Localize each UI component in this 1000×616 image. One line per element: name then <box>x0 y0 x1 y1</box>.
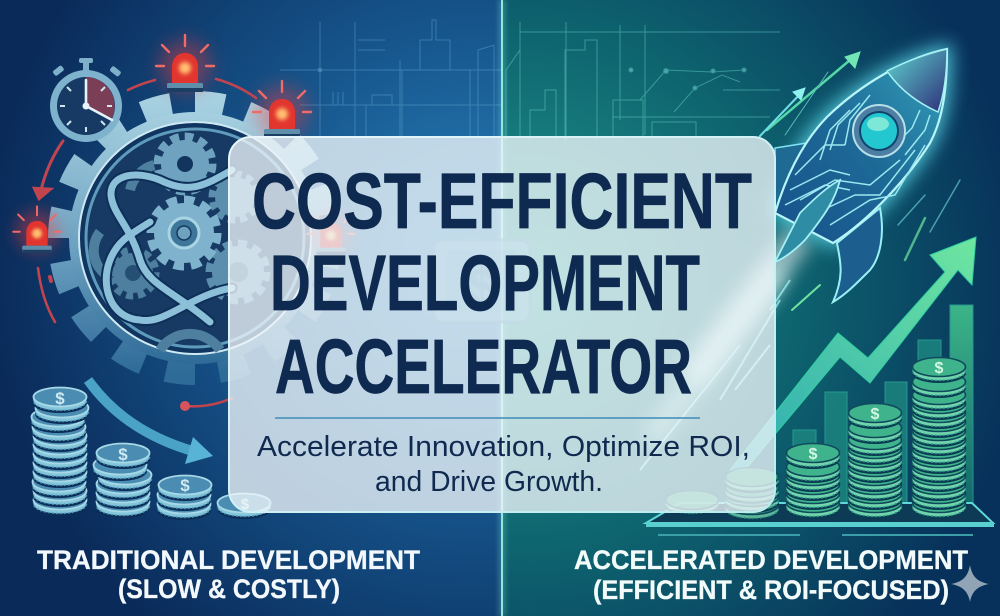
blueprint skyline: traditional side <box>280 20 502 140</box>
coin stacks: shrinking costs: $ <box>180 476 190 495</box>
background bars <box>793 305 973 510</box>
subtitle: and Drive Growth. <box>375 466 603 498</box>
icon: sparkle <box>951 565 989 602</box>
title: COST-EFFICIENT <box>252 156 752 245</box>
rocket nose <box>887 49 947 112</box>
coin stacks: shrinking costs: $ <box>55 389 65 408</box>
coin stacks: growing returns: $ <box>935 360 944 377</box>
background: traditional side <box>0 0 502 616</box>
circuit chip with dollar sign: $ <box>468 258 497 316</box>
centre divider <box>498 0 506 616</box>
subtitle: Accelerate Innovation, Optimize ROI, <box>257 431 750 463</box>
panel: frosted title card <box>229 137 775 512</box>
coin stacks: shrinking costs: $ <box>241 496 250 513</box>
icon: alarm right <box>253 81 311 138</box>
green zigzag growth arrow <box>730 237 976 470</box>
rocket circuit traces <box>785 95 930 225</box>
icon: alarm top <box>156 35 214 92</box>
rocket upper fin <box>775 143 807 214</box>
icon: alarm behind panel <box>307 208 355 255</box>
icon: stopwatch <box>50 58 122 142</box>
subtitle <box>257 431 750 498</box>
label: traditional development <box>37 545 420 604</box>
coin stacks: shrinking costs <box>31 388 271 520</box>
divider rule <box>275 417 700 419</box>
title: ACCELERATOR <box>275 324 692 410</box>
blueprint skyline: accelerated side <box>506 22 780 140</box>
growth platform <box>646 503 994 535</box>
label: accelerated development: (EFFICIENT & ROI-FOCUSED) <box>593 575 949 605</box>
rocket window <box>853 105 905 157</box>
red warning arrows <box>34 79 256 411</box>
tangled pipes <box>106 170 232 322</box>
title: DEVELOPMENT <box>270 238 700 327</box>
icon: large gear <box>61 104 329 372</box>
coin stacks: growing returns: $ <box>871 406 880 423</box>
rocket body <box>775 49 947 243</box>
coin stacks: growing returns: $ <box>809 446 818 463</box>
small growth arrows <box>760 52 960 310</box>
label: traditional development: (SLOW & COSTLY) <box>118 574 340 604</box>
curved blue downward arrow <box>88 380 213 464</box>
coin stacks: growing returns <box>665 358 966 521</box>
coin stacks: shrinking costs: $ <box>118 445 128 464</box>
background: accelerated side <box>502 0 1000 616</box>
title <box>252 156 752 410</box>
icon: alarm left <box>13 206 61 253</box>
rocket side fin <box>775 180 840 262</box>
label: traditional development: TRADITIONAL DEVELOPMENT <box>37 545 420 575</box>
label: accelerated development <box>574 545 968 605</box>
circuit chip with dollar sign <box>424 228 540 340</box>
rocket lower fin <box>833 208 882 302</box>
label: accelerated development: ACCELERATED DEVELOPMENT <box>574 545 968 575</box>
rocket exhaust <box>640 235 800 470</box>
small gears <box>94 137 266 350</box>
ghost coins <box>665 468 779 521</box>
rocket <box>775 49 947 302</box>
